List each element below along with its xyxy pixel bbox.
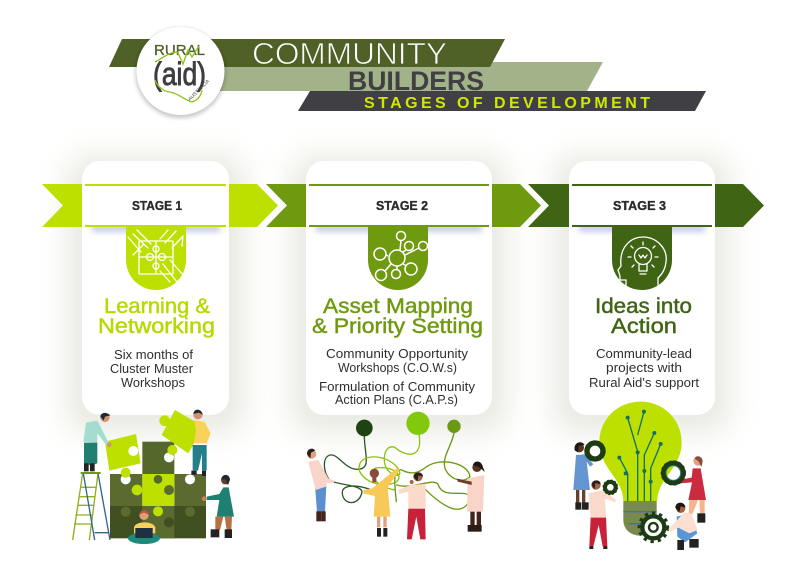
title: community: COMMUNITY bbox=[252, 36, 447, 71]
description bbox=[319, 347, 476, 407]
person with right piece bbox=[191, 410, 211, 476]
illustration: people untangling threads bbox=[307, 412, 485, 539]
panel glow: card shadows bbox=[66, 154, 731, 434]
band bbox=[572, 186, 712, 225]
heading: Learning & bbox=[104, 295, 210, 318]
description: projects with bbox=[606, 361, 682, 375]
card bbox=[306, 161, 492, 415]
lime puzzle piece right bbox=[159, 410, 203, 455]
description: Workshops bbox=[121, 376, 185, 390]
lightbulb bbox=[599, 402, 682, 536]
subtitle: STAGES OF DEVELOPMENT bbox=[364, 95, 650, 112]
description: Workshops (C.O.W.s) bbox=[338, 361, 457, 375]
card bbox=[82, 161, 229, 415]
puzzle blocks bbox=[110, 442, 206, 538]
band bottom line bbox=[309, 225, 489, 227]
header banner bbox=[109, 36, 706, 112]
icon tab: puzzle hands bbox=[126, 227, 186, 290]
gear left bottom bbox=[603, 480, 617, 494]
logo: Rural Aid bbox=[136, 27, 226, 118]
icon tab: head with bulb bbox=[612, 227, 672, 290]
stage label: STAGE 1 bbox=[132, 199, 182, 213]
description: Formulation of Community bbox=[319, 380, 476, 394]
description bbox=[589, 347, 700, 390]
person blue dress bbox=[573, 442, 593, 510]
title: builders: BUILDERS bbox=[348, 66, 484, 96]
heading bbox=[98, 295, 215, 338]
card bbox=[569, 161, 715, 415]
banner: charcoal stripe bbox=[298, 91, 706, 111]
band bottom line bbox=[85, 225, 226, 227]
description: Rural Aid's support bbox=[589, 376, 700, 390]
node medium bbox=[447, 420, 461, 433]
person left bbox=[307, 449, 334, 521]
panel: stage 1 bbox=[82, 161, 229, 415]
description: Action Plans (C.A.P.s) bbox=[335, 393, 458, 407]
panel: stage 3 bbox=[569, 161, 715, 415]
node dark bbox=[356, 420, 373, 436]
band shadow bbox=[92, 224, 220, 232]
arrow: stage 1 chevron bbox=[42, 184, 278, 227]
lime puzzle piece left bbox=[105, 434, 141, 478]
banner: light green stripe bbox=[205, 62, 603, 91]
band bbox=[309, 186, 489, 225]
node bright bbox=[406, 412, 430, 435]
person red dress with gear bbox=[662, 456, 706, 523]
illustration: people building puzzle bbox=[73, 410, 234, 544]
description: Community Opportunity bbox=[326, 347, 469, 361]
band bottom line bbox=[572, 225, 712, 227]
logo: Rural Aid: (aid) bbox=[153, 56, 206, 92]
band top line bbox=[572, 184, 712, 186]
description: Six months of bbox=[114, 348, 194, 362]
person on ladder bbox=[83, 413, 112, 471]
band shadow bbox=[316, 224, 482, 232]
person crouching bbox=[668, 503, 699, 550]
person with laptop bbox=[128, 510, 160, 544]
description: Community-lead bbox=[596, 347, 692, 361]
step ladder bbox=[73, 472, 110, 540]
band bbox=[85, 186, 226, 225]
band top line bbox=[309, 184, 489, 186]
large gear on bulb base bbox=[639, 513, 668, 542]
logo: Rural Aid: AUSTRALIA bbox=[187, 78, 212, 102]
tangled threads bbox=[324, 433, 470, 509]
person pink shirt bbox=[588, 480, 616, 549]
icon tab: network bbox=[368, 227, 428, 290]
banner: dark green stripe bbox=[109, 39, 505, 67]
stage label: STAGE 3 bbox=[613, 199, 666, 213]
arrow: stage 3 chevron bbox=[528, 184, 764, 227]
arrow: stage 2 chevron bbox=[266, 184, 541, 227]
person right bbox=[457, 461, 485, 532]
person red trousers bbox=[398, 472, 426, 539]
logo: Rural Aid: RURAL bbox=[154, 42, 205, 59]
band shadow bbox=[579, 224, 705, 232]
heading: Ideas into bbox=[595, 295, 692, 318]
heading bbox=[595, 295, 692, 338]
person yellow dress bbox=[363, 468, 400, 537]
illustration: people with giant lightbulb bbox=[573, 402, 706, 550]
person at right bbox=[202, 475, 234, 538]
panel: stage 2 bbox=[306, 161, 492, 415]
heading: Asset Mapping bbox=[323, 295, 473, 318]
description: Cluster Muster bbox=[110, 362, 193, 376]
heading: Networking bbox=[98, 315, 215, 338]
heading: & Priority Setting bbox=[312, 315, 483, 338]
band top line bbox=[85, 184, 226, 186]
heading: Action bbox=[611, 315, 677, 338]
gear left top bbox=[585, 441, 605, 461]
heading bbox=[312, 295, 483, 338]
stage label: STAGE 2 bbox=[376, 199, 428, 213]
description bbox=[110, 348, 194, 390]
